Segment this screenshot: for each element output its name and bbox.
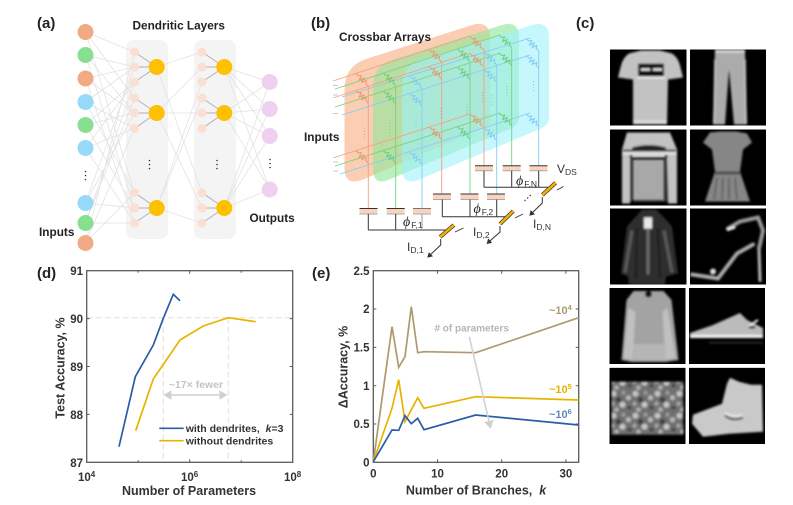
label: phi F,N: ϕ bbox=[516, 174, 523, 189]
y tick labels: 90 bbox=[70, 314, 83, 326]
x tick labels: 0 bbox=[370, 468, 377, 480]
y tick labels: 89 bbox=[70, 362, 83, 374]
label: ID,1: I bbox=[407, 240, 410, 254]
label: ~10^5: ~10 bbox=[549, 384, 568, 396]
ellipsis dots bbox=[524, 195, 531, 201]
panel: (a) dendritic network bbox=[37, 15, 295, 251]
label (b): (b) bbox=[311, 15, 330, 32]
label: Inputs: Inputs bbox=[39, 225, 75, 239]
label: VDS: V bbox=[557, 162, 565, 176]
x tick labels: 20 bbox=[495, 468, 508, 480]
line: without dendrites bbox=[136, 318, 256, 431]
arrow: increasing parameters bbox=[469, 337, 490, 428]
line: ~10^4 parameters bbox=[373, 307, 579, 462]
annotation: 17x fewer: ~17× fewer bbox=[169, 379, 223, 391]
column lines bbox=[368, 48, 539, 208]
panel: (e) delta accuracy chart bbox=[312, 265, 579, 498]
dendritic layer background 1 bbox=[126, 40, 168, 239]
x tick labels bbox=[370, 468, 572, 480]
label: Outputs: Outputs bbox=[250, 211, 295, 225]
y axis title: Test Accuracy, % bbox=[54, 317, 68, 419]
label: ID,2: I bbox=[473, 225, 476, 239]
legend: with dendrites, k=3 bbox=[185, 423, 284, 435]
x tick labels bbox=[78, 470, 302, 484]
label: ~10^4: ~10 bbox=[549, 305, 568, 317]
label: ID,N: D,N bbox=[536, 222, 551, 232]
label: phi F,1: ϕ bbox=[403, 215, 410, 230]
dendritic layer background 2 bbox=[194, 40, 236, 239]
y tick labels: 91 bbox=[70, 266, 84, 278]
blue array plane bbox=[402, 24, 549, 182]
y tick labels: 88 bbox=[70, 410, 84, 422]
guide dashes bbox=[87, 318, 293, 462]
image: pullover bbox=[610, 130, 686, 206]
label (e): (e) bbox=[312, 265, 330, 282]
y tick labels: 2.5 bbox=[354, 266, 370, 278]
y tick labels: 0 bbox=[363, 458, 370, 470]
label: ID,N: I bbox=[533, 217, 536, 231]
ellipsis dots bbox=[85, 159, 271, 180]
x tick labels: 10 bbox=[284, 472, 297, 484]
label: ID,1: D,1 bbox=[410, 245, 424, 255]
label (d): (d) bbox=[37, 265, 56, 282]
label (a): (a) bbox=[37, 15, 55, 32]
x tick labels: 10 bbox=[78, 472, 91, 484]
green array plane bbox=[373, 24, 519, 182]
y tick labels bbox=[354, 266, 370, 470]
plot frame and ticks bbox=[373, 271, 579, 462]
image: trousers bbox=[690, 50, 766, 126]
green memristors bbox=[383, 35, 512, 163]
label: phi F,2: ϕ bbox=[474, 202, 481, 217]
dendrite nodes bbox=[130, 48, 206, 228]
x tick labels: 10 bbox=[181, 472, 194, 484]
connections bbox=[86, 32, 270, 243]
legend bbox=[159, 423, 284, 448]
input nodes bbox=[78, 24, 94, 251]
double arrow bbox=[165, 394, 226, 396]
line: ~10^5 parameters bbox=[373, 380, 579, 462]
image: t-shirt bbox=[610, 50, 686, 126]
line: ~10^6 parameters bbox=[373, 415, 579, 462]
x tick labels: 8 bbox=[297, 470, 302, 479]
y tick labels: 2 bbox=[363, 304, 370, 316]
plot frame and ticks bbox=[87, 271, 293, 462]
label: ID,2: D,2 bbox=[476, 230, 490, 240]
label: ~10^4: 4 bbox=[568, 303, 573, 312]
x tick labels: 4 bbox=[91, 470, 96, 479]
label: phi F,1: F,1 bbox=[411, 220, 423, 230]
transistor 1 with output arrow bbox=[428, 225, 464, 257]
capacitor group N bbox=[475, 166, 549, 187]
y tick labels bbox=[70, 266, 84, 470]
x axis title: Number of Branches, k bbox=[406, 484, 547, 498]
orange memristors bbox=[356, 36, 482, 163]
y tick labels: 87 bbox=[70, 458, 83, 470]
x tick labels: 30 bbox=[560, 468, 572, 480]
line: with dendrites bbox=[119, 294, 180, 447]
transistor N with output arrow bbox=[530, 183, 564, 215]
legend: without dendrites bbox=[185, 436, 273, 448]
capacitor group 1 bbox=[360, 208, 447, 230]
x tick labels: 10 bbox=[431, 468, 444, 480]
x tick labels: 6 bbox=[194, 470, 199, 479]
label: ~10^5: 5 bbox=[568, 382, 572, 391]
label: ~10^6: 6 bbox=[568, 407, 572, 416]
panel: (d) test accuracy chart bbox=[37, 265, 302, 498]
label: phi F,2: F,2 bbox=[482, 207, 493, 217]
image: bag bbox=[610, 368, 686, 444]
panel: (c) fashion image samples bbox=[576, 15, 766, 445]
y tick labels: 0.5 bbox=[354, 419, 370, 431]
x axis title: Number of Parameters bbox=[122, 484, 256, 498]
input arrows bbox=[333, 86, 338, 171]
label: VDS: DS bbox=[565, 167, 577, 177]
transistor 2 with output arrow bbox=[487, 211, 523, 243]
capacitor group 2 bbox=[433, 194, 507, 217]
y tick labels: 1.5 bbox=[354, 342, 370, 354]
label: Inputs: Inputs bbox=[304, 130, 340, 144]
image: high-heeled sandal bbox=[690, 208, 766, 284]
row lines bbox=[333, 35, 530, 174]
crossbar ellipsis dots bbox=[364, 81, 534, 138]
image: jacket bbox=[610, 208, 686, 284]
label: phi F,N: F,N bbox=[524, 179, 537, 189]
image: ankle boot bbox=[689, 368, 765, 444]
blue memristors bbox=[410, 38, 539, 164]
dendrite-to-soma links bbox=[134, 52, 224, 223]
y tick labels: 1 bbox=[363, 381, 370, 393]
heading: Dendritic Layers: Dendritic Layers bbox=[132, 18, 225, 32]
panel: (b) crossbar arrays bbox=[304, 15, 577, 257]
image: dress bbox=[690, 130, 766, 206]
image: sweater bbox=[610, 288, 686, 364]
annotation: number of parameters: # of parameters bbox=[434, 324, 509, 334]
heading: Crossbar Arrays: Crossbar Arrays bbox=[339, 30, 431, 44]
label (c): (c) bbox=[576, 15, 594, 32]
image: sneaker bbox=[689, 288, 765, 364]
y axis title: ΔAccuracy, % bbox=[336, 326, 350, 408]
soma nodes bbox=[149, 59, 232, 216]
output nodes bbox=[262, 74, 278, 198]
label: ~10^6: ~10 bbox=[549, 409, 568, 421]
orange array plane bbox=[344, 24, 490, 182]
